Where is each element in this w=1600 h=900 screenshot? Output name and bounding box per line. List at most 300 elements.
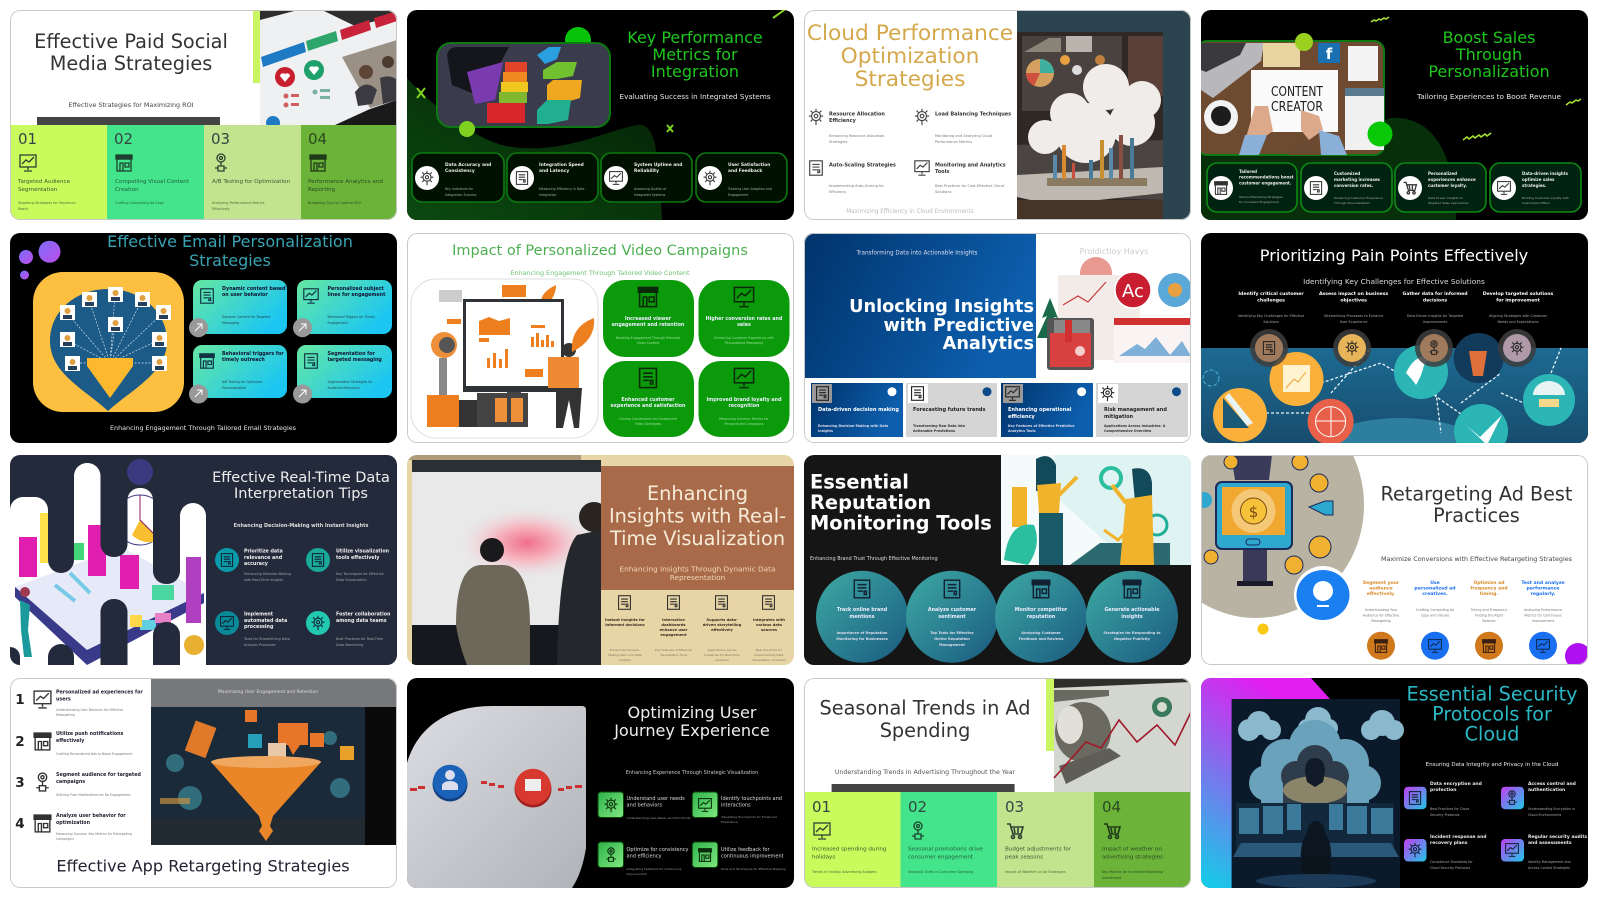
title: Prioritizing Pain Points Effectively — [1260, 246, 1529, 265]
card: Effective App Retargeting Strategies — [10, 678, 397, 888]
step 2: Crafting Compelling Ad — [1416, 608, 1454, 612]
item 1 — [1207, 163, 1297, 212]
oval 1 — [816, 571, 908, 663]
item 1 — [1404, 781, 1482, 817]
item 2: Through Personalization — [1333, 201, 1370, 205]
block 04: Key Months for Increased Marketing — [1102, 870, 1163, 874]
photo: content creator desk: CREATOR — [1271, 100, 1323, 115]
step 2: Visualizing Touchpoints for Enhanced — [721, 815, 777, 819]
oval 4: Generate actionable — [1105, 607, 1160, 613]
step 1 — [1363, 580, 1400, 660]
title — [807, 21, 1013, 92]
block 03 — [997, 792, 1094, 888]
card: Effective Paid Social Media Strategies — [10, 10, 397, 220]
block 01: Increased spending during — [812, 846, 887, 852]
item 4: User Satisfaction — [728, 162, 770, 168]
oval 3: reputation — [1027, 614, 1056, 620]
item 2: conversion rates. — [1334, 183, 1374, 188]
lower network panel — [1201, 333, 1588, 478]
feature 3: Industries for Real-Time — [704, 653, 740, 657]
step 2: User Experience — [1340, 320, 1367, 324]
item 1 — [809, 109, 885, 144]
item 3: Auto-Scaling Strategies — [829, 162, 896, 168]
step 3: timing. — [1480, 591, 1498, 597]
step 4: Measuring Success: Key Metrics for Retargeting — [56, 832, 132, 836]
item 1: Dynamic content based — [222, 286, 286, 292]
step 3: Utilizing Push Notifications for Re-Engagement — [56, 793, 131, 797]
item 3 — [810, 161, 896, 194]
step 3: campaigns — [56, 779, 85, 785]
step 1: Segment your — [1363, 580, 1400, 586]
green circle — [565, 27, 591, 53]
item 1: Key Indicators for — [445, 187, 474, 191]
item 1: customer engagement. — [1239, 180, 1292, 185]
item 4: Tools — [935, 169, 949, 175]
item 3: Video Strategies — [635, 422, 661, 426]
step 4: regularly. — [1531, 591, 1556, 597]
item 2: Customized — [1334, 171, 1360, 176]
step 3: Optimize for consistency — [626, 847, 689, 853]
item 4 — [698, 361, 790, 437]
block 01: holidays — [812, 854, 835, 860]
item 3: Assessing Quality of — [634, 187, 667, 191]
item 2: Enhancing Customer Experience with — [714, 336, 774, 340]
title: Analytics — [943, 334, 1034, 354]
subtitle: Representation — [670, 573, 725, 582]
item 2: Personalized subject — [328, 286, 384, 292]
tip 4: Foster collaboration — [336, 612, 391, 618]
item 4 — [696, 153, 787, 202]
photo: journey dots on grey paper — [407, 706, 586, 888]
step 2: Assess impact on business — [1319, 291, 1388, 297]
block 04: advertising strategies — [1102, 854, 1163, 860]
title — [613, 703, 770, 740]
item 1: on user behavior — [222, 292, 268, 298]
item 2: Monitoring and Analyzing Cloud — [935, 134, 992, 138]
step 4: Tools and Techniques for Effective Mapping — [720, 867, 786, 871]
step 2: Use — [1430, 580, 1440, 586]
tip 3: Tools for Streamlining Data — [243, 637, 290, 641]
title: Insights with Real- — [609, 504, 786, 528]
tip 3: Analysis Processes — [244, 643, 276, 647]
step 1: Retargeting — [1371, 619, 1391, 623]
title: Effective Real-Time Data — [212, 470, 390, 486]
dark green backdrop — [1201, 118, 1456, 220]
item 4: Applications Across Industries: A — [1104, 424, 1166, 428]
footer text: Enhancing Engagement Through Tailored Email Strategies — [110, 424, 297, 432]
title: Personalization — [1428, 62, 1550, 81]
title: Retargeting Ad Best — [1381, 482, 1573, 506]
title: with Predictive — [883, 316, 1034, 336]
item 3: Personalization — [222, 386, 246, 390]
item 4: Tracking User Adoption and — [727, 187, 772, 191]
card: Impact of Personalized Video Campaigns — [407, 233, 794, 443]
oval 4: Negative Publicity — [1114, 637, 1151, 641]
header text: Maximizing User Engagement and Retention — [218, 689, 318, 695]
lime circle — [459, 121, 475, 137]
item 4: Data-driven insights — [1522, 171, 1569, 176]
feature 2: Interactive — [662, 618, 685, 622]
step 2 — [1414, 580, 1456, 660]
item 3 — [1395, 163, 1486, 212]
item 2: Enhancing Customer Experience — [1334, 196, 1383, 200]
subtitle: Transforming Data into Actionable Insights — [855, 250, 978, 256]
photo: orange funnel — [151, 707, 397, 845]
tip 1: Prioritize data — [244, 548, 283, 554]
tip 2: Data Visualization — [336, 578, 367, 582]
subtitle: Enhancing Engagement Through Tailored Video Content — [511, 269, 690, 277]
step 4: continuous improvement — [721, 854, 784, 860]
oval 3 — [995, 571, 1087, 663]
step 1: and behaviors — [626, 802, 662, 808]
block 02: Compelling Visual Content — [115, 179, 190, 185]
step 2: effectively — [56, 738, 85, 744]
image: 3D KPI blocks — [437, 43, 610, 127]
item 4 — [1096, 383, 1188, 437]
title panel — [601, 466, 794, 590]
step 4: Needs and Expectations — [1497, 320, 1539, 324]
oval 3: Feedback and Reviews — [1019, 637, 1063, 641]
item 2: authentication — [1528, 787, 1565, 793]
illustration: tablet with coins — [1148, 392, 1364, 618]
block 02: 02 — [908, 798, 927, 816]
step 2: Identify touchpoints and — [721, 796, 782, 802]
step 2 — [1319, 291, 1388, 367]
item 3: customer loyalty. — [1428, 183, 1467, 188]
item 1: Dynamic Content for Targeted — [222, 315, 270, 319]
item 2: and Latency — [539, 168, 569, 174]
item 4: Best Practices for Cost-Effective Cloud — [935, 184, 1004, 188]
oval 2: Online Reputation — [934, 637, 970, 641]
step 4 — [15, 813, 132, 841]
step 1 — [15, 690, 143, 717]
item 4: Identity Management and — [1528, 860, 1571, 864]
item 1 — [412, 153, 504, 202]
title: Journey Experience — [613, 721, 770, 740]
item 4: Monitoring and Analytics — [935, 162, 1006, 168]
photo: content creator desk: CONTENT — [1271, 85, 1323, 100]
subtitle: Enhancing Brand Trust Through Effective Monitoring — [810, 556, 938, 562]
footer text: Maximizing Efficiency in Cloud Environments — [846, 209, 974, 215]
step 1: Identify critical customer — [1238, 291, 1304, 297]
step 4: Utilize feedback for — [721, 847, 770, 853]
tip 1 — [215, 548, 291, 582]
illustration: analytics dashboard: Ac — [1122, 281, 1144, 302]
title: Key Performance — [627, 28, 763, 47]
photo: social media metrics — [260, 10, 397, 130]
feature 4: Visualization Solutions — [752, 658, 786, 662]
item 4: Solutions — [935, 190, 952, 194]
tip 4: Best Practices for Real-Time — [336, 637, 383, 641]
item 1: Enhancing Decision-Making with Data — [818, 424, 888, 428]
step 1 — [598, 792, 691, 820]
item 2: Integration Speed — [539, 162, 584, 168]
item 3: Compliance Standards for — [1430, 860, 1473, 864]
card: Optimizing User Journey Experience — [407, 678, 794, 888]
step 1: Solutions — [1263, 320, 1279, 324]
card: Retargeting Ad Best Practices — [1201, 455, 1588, 665]
title: Time Visualization — [609, 527, 785, 550]
block 04: Reporting — [308, 187, 336, 193]
step 3: decisions — [1423, 298, 1447, 304]
item 1: Consistency — [445, 168, 475, 174]
title: Effective Paid Social — [34, 30, 228, 53]
step 3 — [598, 842, 689, 876]
block 01: Targeting Strategies for Maximum — [17, 201, 76, 205]
subtitle: Effective Strategies for Maximizing ROI — [68, 101, 194, 109]
block 01: Trends in Holiday Advertising Budgets — [811, 870, 877, 874]
item 2: Behavioral Triggers for Timely — [328, 315, 375, 319]
item 4 — [915, 161, 1006, 194]
tip 3 — [215, 611, 290, 647]
item 1: Insights — [818, 429, 833, 433]
title: Through — [1455, 45, 1522, 64]
title: Optimizing User — [628, 703, 757, 722]
item 3: timely outreach — [222, 357, 265, 363]
tip 2: tools effectively — [336, 555, 380, 561]
step 2: creatives. — [1422, 591, 1448, 597]
oval 2: Top Tools for Effective — [930, 631, 974, 635]
item 1: Data-driven decision making — [818, 407, 899, 413]
block 01: Reach — [18, 207, 28, 211]
block 04: 04 — [308, 130, 327, 148]
feature 1: Making with Live Data — [608, 653, 642, 657]
title: Strategies — [189, 251, 271, 270]
photo: cloud on laptop — [1017, 32, 1163, 220]
block 04 — [301, 125, 397, 220]
step 4: Metrics for Continuous — [1524, 613, 1562, 617]
step 3: Timing and Frequency: — [1469, 608, 1508, 612]
gradient corner — [1201, 678, 1330, 888]
title: Strategies — [855, 67, 965, 92]
photo: dollar and chart — [1054, 678, 1191, 792]
title — [1428, 28, 1550, 81]
subtitle: Maximize Conversions with Effective Retargeting Strategies — [1381, 555, 1573, 563]
step 1 — [1238, 291, 1304, 367]
step 2: interactions — [721, 802, 751, 808]
accent bar — [1046, 678, 1054, 751]
item 2 — [906, 383, 997, 437]
subtitle: Identifying Key Challenges for Effective Solutions — [1303, 277, 1485, 286]
item 3: Key Features of Effective Predictive — [1008, 424, 1075, 428]
feature 2: enhance user — [660, 628, 688, 632]
oval 1: Monitoring for Businesses — [836, 637, 888, 641]
item 1: Boosting Engagement Through Relevant — [616, 336, 681, 340]
tip 4 — [306, 611, 391, 647]
step 2: objectives — [1340, 298, 1367, 304]
illustration: analytics presenter — [411, 279, 598, 438]
item 2: Forecasting future trends — [913, 407, 985, 413]
feature 1: Insights — [619, 658, 631, 662]
subtitle: Enhancing Experience Through Strategic Visualization — [626, 770, 758, 776]
oval 4 — [1086, 571, 1178, 663]
item 4 — [1490, 163, 1581, 212]
subtitle: Evaluating Success in Integrated Systems — [620, 92, 771, 101]
item 1: Enhancing Resource Allocation — [829, 134, 884, 138]
oval 1: Track online brand — [837, 607, 888, 613]
card: Seasonal Trends in Ad Spending — [804, 678, 1191, 888]
card: Boost Sales Through Personalization — [1201, 10, 1588, 220]
step 1: effectively. — [1367, 591, 1395, 597]
title — [609, 482, 786, 550]
item 4: and assessments — [1528, 840, 1572, 846]
block 03: Impact of Weather on Ad Strategies — [1005, 870, 1066, 874]
step 3 — [15, 772, 141, 797]
blue panel — [804, 233, 1036, 378]
title — [212, 470, 390, 502]
block 02: Crafting Compelling Ad Copy — [115, 201, 164, 205]
step 4: 4 — [15, 816, 25, 832]
block 03: Budget adjustments for — [1005, 846, 1072, 852]
item 1: Video Content — [637, 341, 660, 345]
title: Enhancing — [647, 482, 748, 505]
oval 2 — [906, 571, 998, 663]
item 3 — [601, 153, 692, 202]
tip 2 — [306, 548, 390, 582]
item 2: Personalized Messaging — [725, 341, 763, 345]
step 3: frequency and — [1470, 586, 1508, 592]
step 3 — [1469, 580, 1508, 660]
illustration: analytics dashboard — [1037, 257, 1192, 370]
tip 1: accuracy — [244, 561, 269, 567]
item 4 — [293, 345, 392, 404]
block 02: Creation — [115, 187, 139, 193]
tip 4: Data Monitoring — [336, 643, 363, 647]
item 4: strategies. — [1522, 183, 1547, 188]
item 3: Driving Conversions via Customized — [619, 417, 677, 421]
block 01 — [10, 125, 107, 220]
block 03: 03 — [211, 130, 230, 148]
item 1: Tailored — [1239, 169, 1257, 174]
item 2: Integration — [539, 193, 557, 197]
feature 4: Best Practices for — [756, 648, 783, 652]
title: Media Strategies — [50, 52, 212, 75]
step 1: Understanding User Needs and Pain Points — [626, 816, 691, 820]
dark bar — [37, 117, 220, 125]
block 03: peak seasons — [1005, 854, 1043, 860]
oval 2: Analyze customer — [928, 607, 977, 613]
step 1: Personalized ad experiences for — [56, 690, 143, 696]
item 2: Higher conversion rates and — [706, 316, 783, 322]
item 2 — [698, 280, 790, 357]
item 2 — [1501, 781, 1576, 817]
item 1: Integration Success — [445, 193, 477, 197]
item 4 — [1501, 834, 1587, 870]
item 4: Engagement — [728, 193, 749, 197]
item 4: Risk management and — [1104, 407, 1167, 413]
title: Reputation — [810, 491, 931, 514]
title — [627, 28, 763, 81]
feature 1: Instant insights for — [605, 618, 645, 622]
dark green swoosh — [407, 78, 662, 220]
item 3: Reliability — [634, 168, 659, 174]
feature 1: Enhancing Decision- — [610, 648, 640, 652]
step 1: users — [56, 696, 71, 702]
oval 2: sentiment — [938, 614, 966, 620]
step 4: Analyzing Performance — [1524, 608, 1562, 612]
card: Key Performance Metrics for Integration — [407, 10, 794, 220]
item 1: Security Protocols — [1430, 813, 1460, 817]
title: Cloud Performance — [807, 21, 1013, 46]
item 2: Access control and — [1528, 781, 1576, 787]
step 4: optimization — [56, 820, 91, 826]
photo: content creator desk — [1197, 41, 1384, 155]
item 4: Building Customer Loyalty with — [1522, 196, 1569, 200]
item 1: engagement and retention — [612, 322, 685, 328]
step 1: 1 — [15, 692, 25, 708]
block 01: Targeted Audience — [17, 179, 71, 185]
step 3: 3 — [15, 775, 25, 791]
feature 2: Key Features of Effective — [655, 648, 692, 652]
illustration heading: Proldictioy Havys — [1080, 247, 1148, 256]
subtitle — [620, 564, 775, 582]
item 2: sales — [737, 322, 751, 328]
oval 3: Monitor competitor — [1015, 607, 1068, 613]
item 1: protection — [1430, 787, 1456, 793]
feature 3: driven storytelling — [703, 623, 742, 627]
feature 4: sources — [761, 628, 778, 632]
item 2: Performance Metrics — [935, 140, 972, 144]
tip 3: Implement — [244, 612, 274, 618]
illustration: personalization funnel — [33, 272, 184, 412]
item 3 — [189, 345, 287, 404]
title — [107, 232, 353, 270]
item 3: recovery plans — [1430, 840, 1468, 846]
step 4 — [1483, 291, 1554, 367]
step 3 — [1402, 291, 1468, 367]
item 3 — [603, 361, 694, 437]
title: Integration — [651, 62, 739, 81]
item 4: Access Control Strategies — [1528, 866, 1570, 870]
oval 1: Importance of Reputation — [837, 631, 888, 635]
feature 4: various data — [756, 623, 783, 627]
item 1 — [189, 280, 287, 337]
feature 1 — [605, 596, 646, 662]
feature 2: Visualization Tools — [660, 653, 688, 657]
card: Prioritizing Pain Points Effectively — [1201, 233, 1588, 443]
purple corner — [1565, 643, 1591, 669]
green circle — [1368, 122, 1392, 146]
illustration: tablet with coins: $ — [1249, 503, 1258, 521]
oval 4: insights — [1121, 614, 1143, 620]
step 3: Integrating Feedback for Continuous — [626, 867, 682, 871]
block 04: Budgeting Tips for Optimal ROI — [308, 201, 361, 205]
item 2 — [507, 153, 598, 202]
block 04 — [1094, 792, 1191, 888]
step 4: Aligning Strategies with Customer — [1489, 314, 1548, 318]
item 2: lines for engagement — [328, 292, 386, 298]
item 3: Implementing Auto-Scaling for — [829, 184, 884, 188]
item 2 — [293, 280, 392, 337]
title — [34, 30, 228, 75]
purple dots — [19, 241, 60, 280]
step 3: Finding the Right — [1475, 613, 1504, 617]
card: Unlocking Insights with Predictive Analytics — [804, 233, 1191, 443]
title: Essential Security — [1407, 682, 1577, 706]
step 4: Improvement — [1532, 619, 1555, 623]
step 1: Audience for Effective — [1363, 613, 1399, 617]
oval 1: mentions — [849, 614, 875, 620]
block 03: 03 — [1005, 798, 1024, 816]
item 1: Best Practices for Cloud — [1430, 807, 1469, 811]
card: Effective Email Personalization Strategies — [10, 233, 397, 443]
card: Essential Reputation Monitoring Tools — [804, 455, 1191, 665]
item 2: Understanding Encryption in — [1528, 807, 1575, 811]
item 2: Engagement — [328, 321, 349, 325]
step 4: Develop targeted solutions — [1483, 291, 1554, 297]
item 4: recognition — [729, 403, 760, 409]
step 3: Gather data for informed — [1402, 291, 1468, 297]
